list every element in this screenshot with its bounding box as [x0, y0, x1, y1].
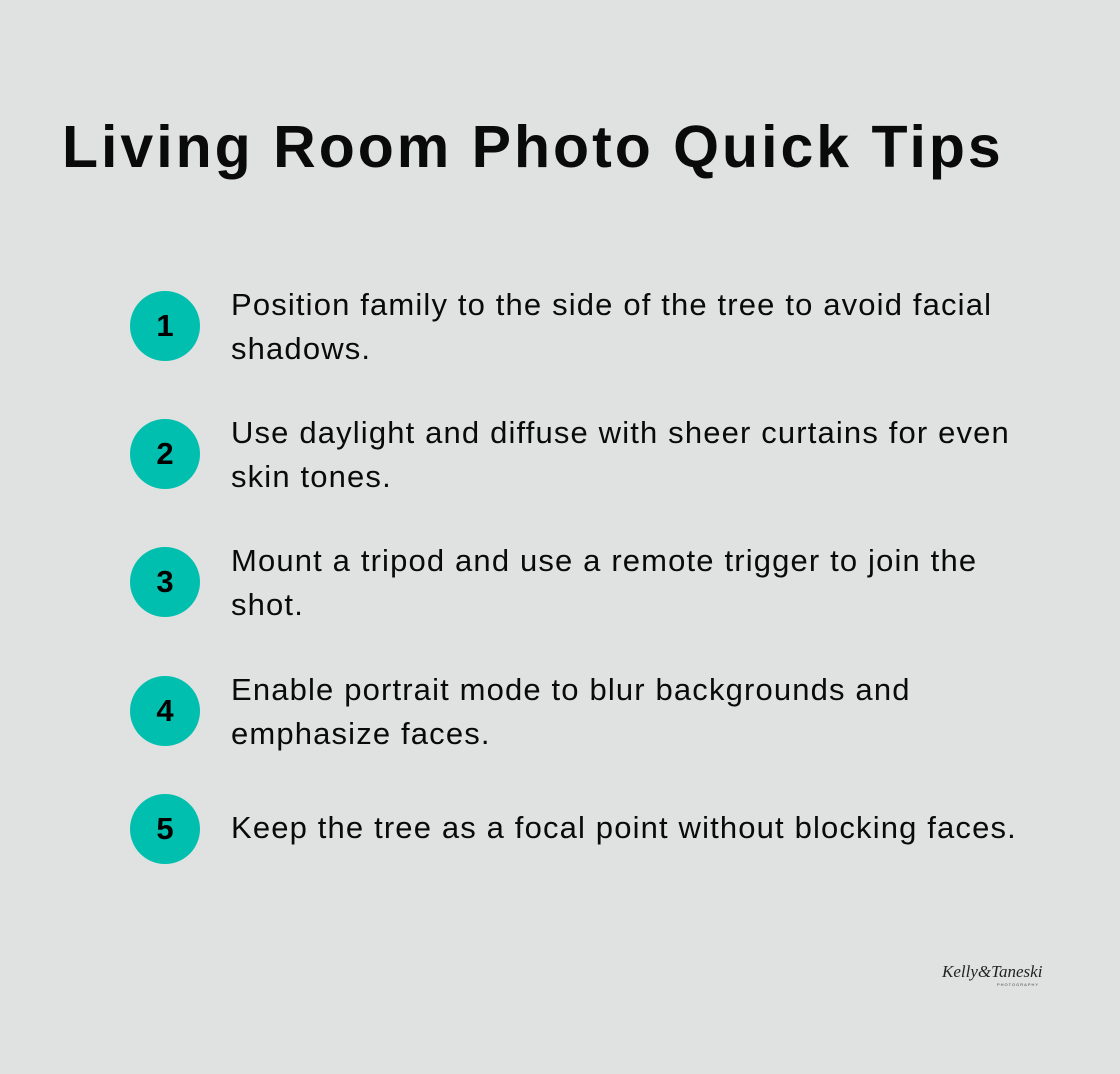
logo signature: PHOTOGRAPHY: [997, 982, 1039, 987]
text 4: Enable portrait mode to blur backgrounds and: [231, 672, 911, 707]
badge 2: [130, 419, 200, 489]
title: Living Room Photo Quick Tips: [62, 114, 1004, 180]
tip 3: [130, 543, 977, 622]
text 2: [231, 415, 1010, 494]
text 2: skin tones.: [231, 459, 392, 494]
tip 5: [130, 794, 1017, 864]
badge 5: [130, 794, 200, 864]
badge 3: [130, 547, 200, 617]
text 2: Use daylight and diffuse with sheer curtains for even: [231, 415, 1010, 450]
badge 3: 3: [156, 564, 174, 599]
logo signature: Kelly&Taneski: [942, 962, 1042, 981]
text 3: [231, 543, 977, 622]
badge 4: 4: [156, 693, 174, 728]
text 5: Keep the tree as a focal point without blocking faces.: [231, 810, 1017, 845]
tip 2: [130, 415, 1010, 494]
text 3: shot.: [231, 587, 304, 622]
badge 1: [130, 291, 200, 361]
text 1: shadows.: [231, 331, 371, 366]
badge 5: 5: [156, 811, 174, 846]
badge 4: [130, 676, 200, 746]
text 3: Mount a tripod and use a remote trigger to join the: [231, 543, 977, 578]
text 1: Position family to the side of the tree to avoid facial: [231, 287, 992, 322]
badge 2: 2: [156, 436, 174, 471]
text 1: [231, 287, 992, 366]
text 4: [231, 672, 911, 751]
tip 4: [130, 672, 911, 751]
badge 1: 1: [156, 308, 174, 343]
tip 1: [130, 287, 992, 366]
text 4: emphasize faces.: [231, 716, 491, 751]
